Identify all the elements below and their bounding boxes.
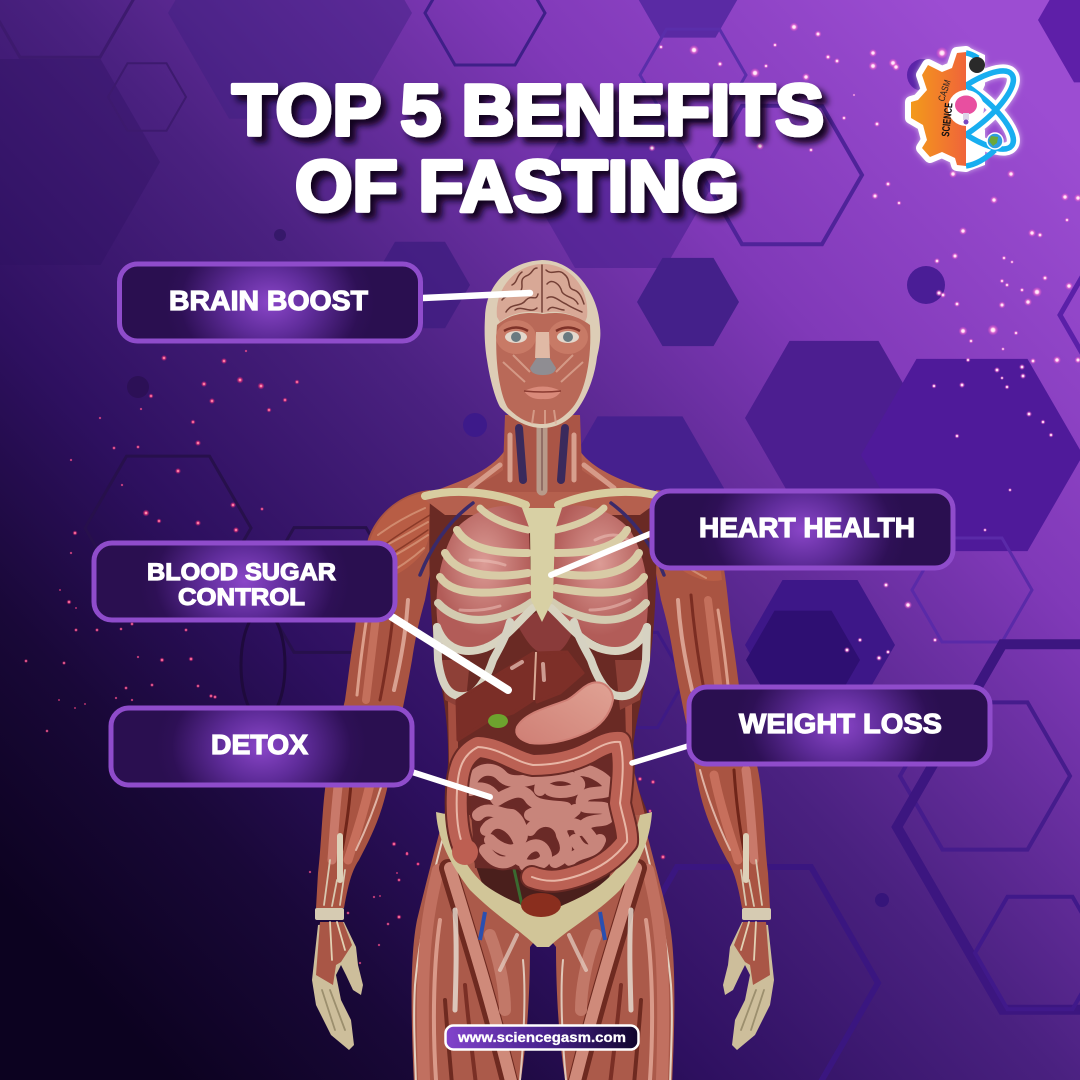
face (496, 313, 590, 424)
logo wordmark (936, 79, 956, 137)
logo atom orbits (966, 50, 1016, 169)
large intestine (452, 742, 627, 881)
nose (530, 357, 556, 375)
stomach (516, 682, 613, 744)
label: heart health: HEART HEALTH (699, 512, 915, 543)
logo planet (969, 57, 985, 73)
brain (497, 264, 587, 322)
title: TOP 5 BENEFITS (232, 71, 824, 151)
logo brain bulb (948, 90, 984, 126)
label: weight loss: WEIGHT LOSS (739, 708, 942, 739)
label: brain boost: BRAIN BOOST (169, 285, 368, 316)
mouth (524, 386, 561, 399)
liver (457, 652, 583, 740)
lungs (436, 505, 648, 710)
pelvis (436, 812, 652, 947)
label: detox: DETOX (211, 729, 309, 760)
label: blood sugar control: CONTROL (178, 584, 305, 611)
label: blood sugar control (94, 543, 395, 620)
connector: detox (412, 772, 490, 797)
logo wordmark: SCIENCE (940, 102, 956, 137)
logo orange gear (911, 52, 966, 166)
label: detox (111, 708, 412, 785)
eyes (496, 320, 588, 354)
title: OF FASTING (295, 147, 739, 227)
website pill (446, 1026, 638, 1050)
connector: blood sugar control (392, 617, 508, 690)
legs (412, 812, 674, 1080)
title (232, 71, 824, 227)
connector: weight loss (632, 746, 688, 763)
small intestine (468, 758, 620, 872)
logo: sciencegasm (908, 46, 1024, 172)
logo earth (987, 133, 1003, 149)
torso (420, 415, 666, 815)
label: blood sugar control: BLOOD SUGAR (147, 559, 336, 586)
left arm (312, 490, 440, 1050)
human anatomy figure (312, 260, 774, 1080)
gallbladder (488, 714, 508, 728)
rib cage (420, 492, 664, 696)
logo white backing (908, 46, 1024, 172)
label: brain boost (120, 264, 420, 341)
right arm (646, 490, 774, 1050)
label: heart health (652, 491, 953, 568)
logo wordmark: CASM (936, 79, 954, 103)
website pill: www.sciencegasm.com (457, 1029, 626, 1045)
label: weight loss (689, 687, 990, 764)
connector: heart health (551, 533, 652, 575)
connector: brain boost (423, 293, 530, 298)
head (485, 260, 600, 428)
